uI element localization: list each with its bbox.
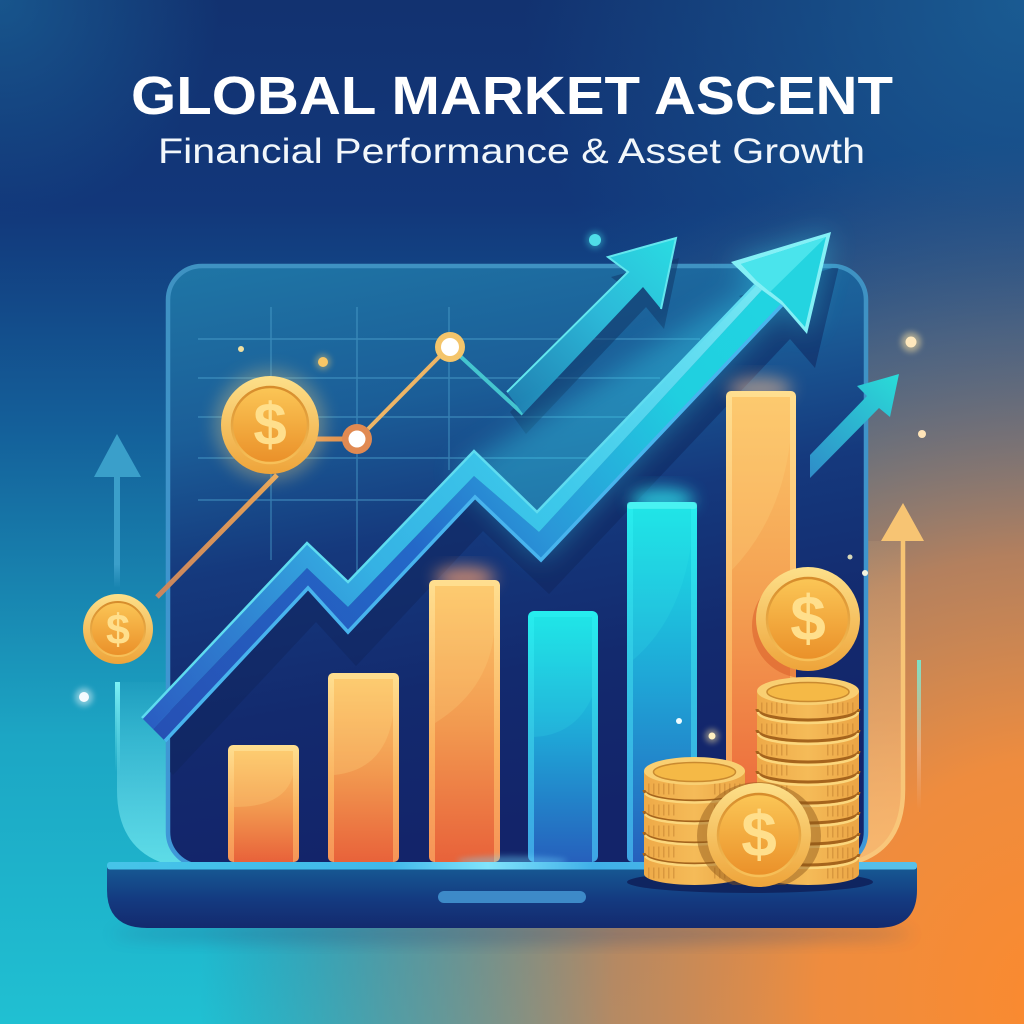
sparkle dots [75,231,926,743]
laptop base [107,856,917,928]
bar 2 [328,673,399,862]
small right arrow [810,374,899,478]
laptop trackpad handle [438,891,586,903]
node: lower [342,424,372,454]
trend line with nodes [157,332,523,597]
panel: monitor screen [168,266,866,866]
main arrow glow [455,232,831,560]
main arrow shadow [150,266,839,775]
upper teal arrow [507,238,676,414]
upper arrow shadow [510,258,679,434]
coin stack shadow [627,871,873,893]
coin stack: left [644,757,745,885]
bar 4 [528,611,598,862]
coin: left: $ [106,606,130,654]
subtitle: Financial Performance & Asset Growth [158,131,865,171]
title: GLOBAL MARKET ASCENT [131,66,893,126]
right swoosh [836,541,903,864]
left up arrow [94,434,141,588]
front coin shadow [697,782,821,890]
coin: floating right [756,567,860,671]
bar 6 [726,391,796,785]
left swoosh [117,682,212,862]
left lower cyan line [115,682,120,772]
coin: chart [214,369,326,481]
coin: chart: $ [253,391,287,458]
chart grid [198,307,700,575]
ground shadow [112,924,912,944]
node: upper [435,332,465,362]
coin stack: right [757,677,859,885]
bar 5 [627,502,697,862]
coin: front: $ [741,798,777,870]
right up arrow [858,503,924,861]
bar 1 [228,745,299,862]
coin: front [707,783,811,887]
bar glows [435,377,792,589]
bar 3 [429,580,500,862]
coin: left [83,594,153,664]
coin: floating right: $ [790,582,826,654]
main zigzag arrow [142,232,831,741]
thin teal accent line [917,660,921,810]
